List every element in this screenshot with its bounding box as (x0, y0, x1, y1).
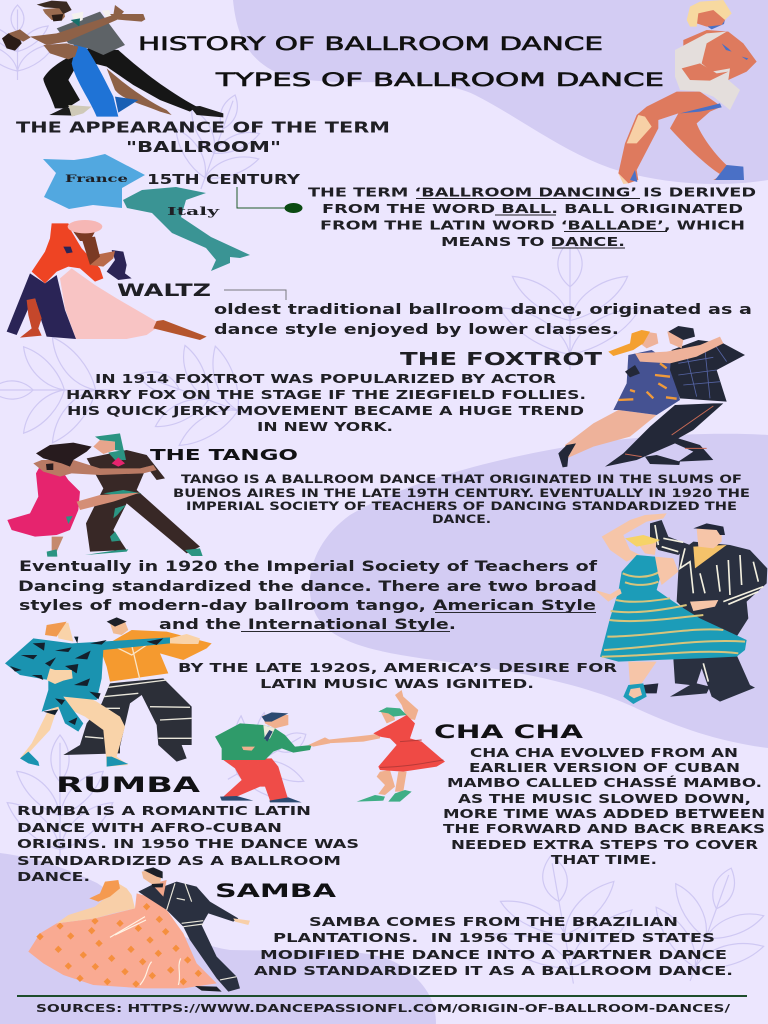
text: cha cha description: EARLIER VERSION OF CUBAN (469, 760, 740, 775)
heading: foxtrot: THE FOXTROT (400, 350, 602, 370)
text: waltz description: oldest traditional ballroom dance, originated as a (214, 302, 752, 318)
heading: samba: SAMBA (215, 881, 337, 902)
text: rumba description: DANCE. (17, 869, 90, 884)
text: tango description: TANGO IS A BALLROOM DANCE THAT ORIGINATED IN THE SLUMS OF (181, 472, 742, 486)
connector: century to term (237, 187, 302, 213)
text: cha cha description: NEEDED EXTRA STEPS TO COVER (451, 837, 758, 852)
illustration: samba couple (28, 867, 250, 992)
text: tango description: IMPERIAL SOCIETY OF TEACHERS OF DANCING STANDARDIZED THE (186, 499, 737, 513)
map: Italy (123, 187, 250, 271)
heading: waltz: WALTZ (117, 281, 211, 300)
text: term origin: MEANS TO DANCE. (441, 234, 625, 249)
map: France (43, 154, 145, 209)
text: tango description: BUENOS AIRES IN THE LATE 19TH CENTURY. EVENTUALLY IN 1920 THE (173, 486, 750, 500)
heading: appearance of the term: "BALLROOM" (126, 138, 281, 156)
text: rumba description: STANDARDIZED AS A BALLROOM (17, 853, 341, 868)
text: samba description: MODIFIED THE DANCE INTO A PARTNER DANCE (260, 947, 727, 962)
text: waltz description: dance style enjoyed by lower classes. (214, 322, 619, 338)
text: styles of tango: Dancing standardized the dance. There are two broad (18, 579, 597, 595)
subtitle: TYPES OF BALLROOM DANCE (214, 69, 664, 91)
heading: the tango: THE TANGO (150, 446, 298, 464)
divider rule (17, 995, 747, 997)
connector: waltz (224, 290, 286, 300)
text: foxtrot description: IN 1914 FOXTROT WAS POPULARIZED BY ACTOR (95, 371, 556, 386)
text: samba description (254, 914, 733, 978)
text: latin music (178, 660, 617, 691)
text: foxtrot description: HARRY FOX ON THE STAGE IF THE ZIEGFIELD FOLLIES. (66, 387, 586, 402)
background blob: top right (233, 0, 768, 184)
label: Italy: Italy (167, 205, 220, 218)
illustration: tango couple (7, 433, 203, 557)
text: rumba description: RUMBA IS A ROMANTIC LATIN (17, 803, 311, 818)
map: France and Italy (43, 154, 250, 271)
illustration: swing couple with striped suit (595, 513, 767, 704)
background blob: middle right (310, 434, 768, 748)
text: rumba description: ORIGINS. IN 1950 THE DANCE WAS (17, 836, 359, 851)
text: cha cha description: MAMBO CALLED CHASSÉ MAMBO. (447, 775, 762, 790)
text: latin music: LATIN MUSIC WAS IGNITED. (260, 676, 534, 691)
label: 15th century: 15TH CENTURY (147, 173, 301, 188)
text: cha cha description: MORE TIME WAS ADDED BETWEEN (443, 806, 765, 821)
illustration: swing couple green and red (215, 690, 445, 802)
text: styles of tango: styles of modern-day ballroom tango, American Style (19, 598, 596, 614)
text: cha cha description: CHA CHA EVOLVED FROM AN (470, 745, 738, 760)
illustration: rumba couple (5, 617, 212, 767)
heading: appearance of the term (16, 118, 390, 156)
text: samba description: SAMBA COMES FROM THE BRAZILIAN (309, 914, 678, 929)
illustration: waltz couple (7, 220, 207, 340)
illustration: foxtrot couple (558, 326, 745, 467)
text: rumba description (17, 803, 359, 884)
heading: cha cha: CHA CHA (434, 722, 584, 743)
illustration: tango couple top left (2, 1, 223, 117)
text: cha cha description (443, 745, 765, 867)
text: cha cha description: THAT TIME. (551, 852, 657, 867)
text: term origin (308, 184, 756, 249)
text: styles of tango (18, 559, 598, 633)
background blob: bottom left (0, 853, 436, 1024)
text: latin music: BY THE LATE 1920S, AMERICA’S DESIRE FOR (178, 660, 617, 675)
text: term origin: FROM THE WORD BALL. BALL ORIGINATED (322, 201, 743, 216)
text: samba description: AND STANDARDIZED IT AS A BALLROOM DANCE. (254, 963, 733, 978)
text: foxtrot description: IN NEW YORK. (257, 419, 393, 434)
text: tango description: DANCE. (432, 512, 491, 526)
text: foxtrot description: HIS QUICK JERKY MOVEMENT BECAME A HUGE TREND (67, 403, 584, 418)
title: HISTORY OF BALLROOM DANCE (138, 33, 603, 55)
text: term origin: FROM THE LATIN WORD ‘BALLADE’, WHICH (320, 218, 745, 232)
label: France: France (65, 173, 128, 185)
text: cha cha description: THE FORWARD AND BACK BREAKS (443, 821, 765, 836)
heading: appearance of the term: THE APPEARANCE OF THE TERM (16, 118, 390, 136)
text: cha cha description: AS THE MUSIC SLOWED DOWN, (458, 791, 751, 806)
text: styles of tango: and the International Style. (159, 617, 456, 633)
heading: rumba: RUMBA (56, 773, 201, 797)
text: term origin: THE TERM ‘BALLROOM DANCING’ IS DERIVED (308, 184, 756, 200)
text: tango description (173, 472, 750, 526)
sources: SOURCES: HTTPS://WWW.DANCEPASSIONFL.COM/ORIGIN-OF-BALLROOM-DANCES/ (36, 1002, 731, 1015)
illustration: dancer top right (618, 0, 757, 184)
text: waltz description (214, 302, 752, 338)
text: rumba description: DANCE WITH AFRO-CUBAN (17, 820, 282, 835)
text: styles of tango: Eventually in 1920 the Imperial Society of Teachers of (19, 559, 598, 575)
text: foxtrot description (66, 371, 586, 434)
text: samba description: PLANTATIONS. IN 1956 THE UNITED STATES (273, 930, 715, 945)
